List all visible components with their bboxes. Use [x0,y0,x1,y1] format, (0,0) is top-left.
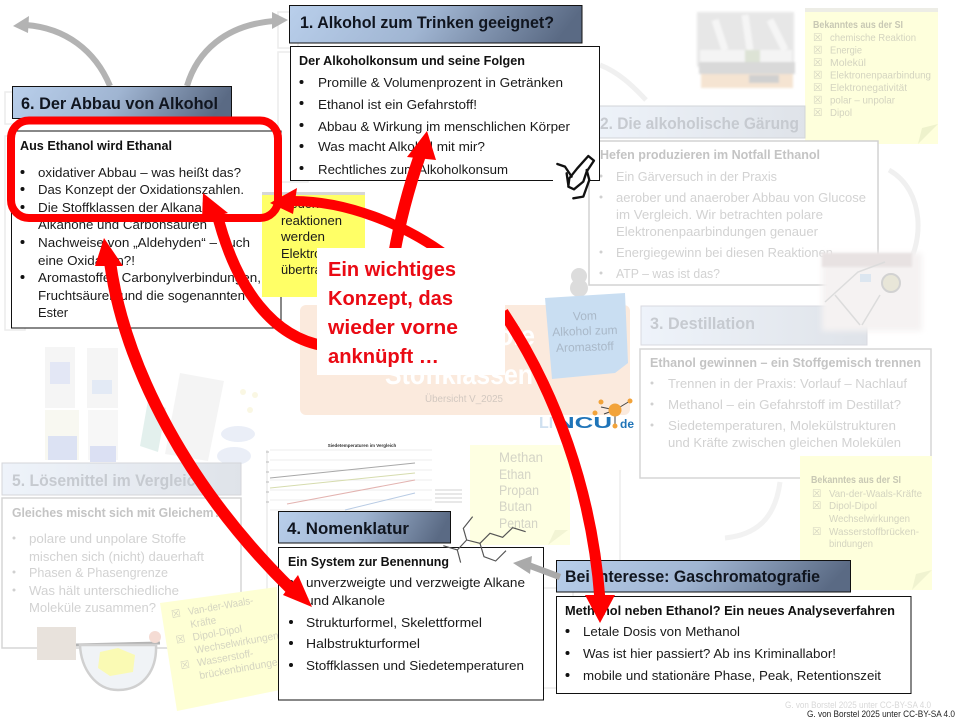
logo: LINCU.de: NCU [556,415,612,432]
panel: 6. Aus Ethanol wird Ethanal: Alkanone und Carbonsäuren [38,217,207,232]
faded sticky note: Bekanntes aus der SI (bottom): Dipol-Dipol [829,500,877,512]
faded panel: 3. Destillation: Methanol – ein Gefahrstoff im Destillat? [668,397,901,412]
header: 6. Der Abbau von Alkohol [12,86,232,118]
panel: 6. Aus Ethanol wird Ethanal: eine Oxidation?! [38,253,135,268]
faded title panel: Stoffklassen [300,305,630,415]
faded sticky note: Bekanntes aus der SI (top): Elektronegativität [830,82,907,94]
sticky note: Redoxreaktionen: übertragen [281,262,343,277]
panel: 4. Ein System zur Benennung: Ein System zur Benennung [288,554,449,569]
callout: Ein wichtiges Konzept: wieder vorne [327,317,458,339]
panel: 1. Der Alkoholkonsum und seine Folgen: Promille & Volumenprozent in Getränken [318,75,563,90]
panel: 4. Ein System zur Benennung: und Alkanole [306,593,385,608]
faded blue note: Vom Alkohol zum Aromastoff [545,293,628,379]
faded rotated sticky note: brückenbindungen [198,655,284,682]
panel: Methanol neben Ethanol: mobile und stationäre Phase, Peak, Retentionszeit [583,668,881,683]
logo: LINCU.de [539,398,634,432]
panel: 6. Aus Ethanol wird Ethanal: oxidativer Abbau – was heißt das? [38,165,241,180]
faded sticky note: Bekanntes aus der SI (bottom): Wasserstoffbrücken- [829,526,919,538]
icon: skeletal formula molecule [443,517,526,563]
faded footer: G. von Borstel 2025 unter CC-BY-SA 4.0 [785,700,931,711]
faded title panel: Stoffklassen: Stoffklassen [385,359,533,390]
faded rotated sticky note: ☒ [179,659,191,672]
faded blue note: Vom Alkohol zum Aromastoff: Aromastoff [556,339,615,355]
faded panel: 3. Destillation: 3. Destillation [650,314,755,333]
panel: Methanol neben Ethanol: Was ist hier passiert? Ab ins Kriminallabor! [583,646,836,661]
header: Bei Interesse: Gaschromatografie: Bei Interesse: Gaschromatografie [565,567,820,586]
faded sticky note: Bekanntes aus der SI (top): Bekanntes aus der SI [813,19,903,31]
callout: Ein wichtiges Konzept: Ein wichtiges [328,259,456,281]
faded rotated sticky note: ☒ [170,608,182,621]
faded rotated sticky note: Wasserstoff- [196,647,255,669]
panel: 4. Ein System zur Benennung: Halbstrukturformel [306,636,420,651]
grey arrow: Gaschromatografie to Nomenklatur [513,556,560,577]
header: 1. Alkohol zum Trinken geeignet? [290,6,582,43]
faded panel: 3. Destillation: Siedetemperaturen, Molekülstrukturen [668,418,896,433]
panel: 6. Aus Ethanol wird Ethanal: Das Konzept der Oxidationszahlen. [38,182,244,197]
faded sticky note: Bekanntes aus der SI (top): ☒ [813,94,822,106]
faded panel: 2. Die alkoholische Gärung: im Vergleich. Wir betrachten polare [616,207,823,222]
faded sticky note: Bekanntes aus der SI (top): ☒ [813,32,822,44]
faded photo: distillation apparatus [822,253,922,331]
faded sticky note: Bekanntes aus der SI (top): polar – unpolar [830,94,895,106]
faded panel: 3. Destillation: und Kräfte zwischen gleichen Molekülen [668,435,901,450]
faded sticky note: Bekanntes aus der SI (bottom): bindungen [829,538,873,550]
faded sticky note: Bekanntes aus der SI (top): ☒ [813,107,822,119]
faded sticky note: Bekanntes aus der SI (top): chemische Reaktion [830,32,916,44]
faded rotated sticky note [160,587,284,711]
faded photos: test cards and pipette samples [45,347,258,465]
panel: 4. Ein System zur Benennung: Stoffklassen und Siedetemperaturen [306,658,524,673]
red arrow: callout to Redox note [270,188,450,258]
faded panel: 5. Lösemittel im Vergleich: mischen sich (nicht) dauerhaft [29,549,204,564]
faded sticky note: alkane list: Butan [499,499,532,514]
callout: Ein wichtiges Konzept: anknüpft … [328,346,439,368]
faded rotated sticky note: Wechselwirkungen [194,630,280,656]
red arrow: callout to Letale Dosis [503,312,615,623]
red double-headed arrow: panel 6 to Nomenklatur [95,238,312,607]
sticky note: Redoxreaktionen [262,192,365,297]
red arrow: callout to menschlichen Körper [394,131,436,255]
logo: LINCU.de: de [620,417,634,431]
faded sticky note: alkane list: Pentan [499,516,538,531]
panel: Methanol neben Ethanol [556,596,911,694]
faded sticky note: Bekanntes aus der SI (bottom) [800,456,932,590]
faded sticky note: Bekanntes aus der SI (top): ☒ [813,70,822,82]
header: 6. Der Abbau von Alkohol: 6. Der Abbau von Alkohol [21,94,218,113]
faded rotated sticky note: Dipol-Dipol [192,623,243,644]
faded panel: 2. Die alkoholische Gärung: Energiegewinn bei diesen Reaktionen [616,245,833,260]
faded panel: 2. Die alkoholische Gärung: Ein Gärversuch in der Praxis [616,169,777,184]
faded title panel: Stoffklassen: Übersicht V_2025 [425,393,503,405]
faded blue note: Vom Alkohol zum Aromastoff: Vom [573,309,597,323]
grey arrow: to panel 5 direction (left) [13,16,110,86]
header: 4. Nomenklatur: 4. Nomenklatur [287,519,409,538]
panel: 1. Der Alkoholkonsum und seine Folgen: Abbau & Wirkung im menschlichen Körper [318,119,571,134]
faded sticky note: Bekanntes aus der SI (top): Energie [830,44,862,56]
faded title panel: Stoffklassen: Alkohole [425,320,535,351]
panel: 6. Aus Ethanol wird Ethanal: Die Stoffklassen der Alkanale, [38,200,216,215]
red rounded highlight frame [11,120,278,218]
faded sticky note: alkane list: Methan [499,450,543,465]
panel: 1. Der Alkoholkonsum und seine Folgen: Der Alkoholkonsum und seine Folgen [299,53,525,68]
panel: Methanol neben Ethanol: Methanol neben Ethanol? Ein neues Analyseverfahren [565,603,895,618]
sticky note: Redoxreaktionen: reaktionen [281,213,342,228]
header: 1. Alkohol zum Trinken geeignet?: 1. Alkohol zum Trinken geeignet? [300,13,554,32]
faded blue note: Vom Alkohol zum Aromastoff: Alkohol zum [552,323,618,339]
panel: 6. Aus Ethanol wird Ethanal [12,131,281,328]
panel: 1. Der Alkoholkonsum und seine Folgen [290,46,600,180]
faded sticky note: Bekanntes aus der SI (bottom): Bekanntes aus der SI [811,474,901,486]
faded sticky note: Bekanntes aus der SI (bottom): ☒ [812,500,821,512]
faded sticky note: alkane list [470,445,570,545]
faded sticky note: Bekanntes aus der SI (top) [805,8,938,144]
faded sticky note: Bekanntes aus der SI (top): ☒ [813,82,822,94]
panel: 1. Der Alkoholkonsum und seine Folgen: Was macht Alkohol mit mir? [318,139,485,154]
panel: Methanol neben Ethanol: Letale Dosis von Methanol [583,624,740,639]
faded panel: 5. Lösemittel im Vergleich: Phasen & Phasengrenze [29,565,168,580]
faded panel: 3. Destillation [640,306,931,478]
faded sticky note: Bekanntes aus der SI (top): ☒ [813,57,822,69]
faded rotated sticky note: Van-der-Waals- [187,595,255,618]
sticky note: Redoxreaktionen: Redox- [281,196,323,211]
faded sticky note: Bekanntes aus der SI (bottom): ☒ [812,488,821,500]
faded panel: 5. Lösemittel im Vergleich: Was hält unterschiedliche [29,583,179,598]
faded sticky note: Bekanntes aus der SI (bottom): Wechselwirkungen [829,513,910,525]
faded panel: 5. Lösemittel im Vergleich: Moleküle zusammen? [29,600,156,615]
sticky note: Redoxreaktionen: werden [280,229,325,244]
faded panel: 2. Die alkoholische Gärung: aerober und anaerober Abbau von Glucose [616,190,866,205]
logo: LINCU.de: LI [539,415,553,432]
faded panel: 5. Lösemittel im Vergleich [2,463,241,648]
faded line chart: Siedetemperaturen im Vergleich: Siedetemperaturen im Vergleich [328,443,397,448]
header: 4. Nomenklatur [278,512,450,543]
callout: Ein wichtiges Konzept [317,248,505,375]
grey arrow: to panel 1 [187,12,288,86]
panel: 4. Ein System zur Benennung: unverzweigte und verzweigte Alkane [306,575,525,590]
faded sticky note: Bekanntes aus der SI (top): ☒ [813,44,822,56]
faded panel: 2. Die alkoholische Gärung: Elektronenpaarbindungen genauer [616,224,819,239]
faded panel: 2. Die alkoholische Gärung: Hefen produzieren im Notfall Ethanol [600,147,820,162]
faded panel: 5. Lösemittel im Vergleich: polare und unpolare Stoffe [29,531,186,546]
faded line chart: Siedetemperaturen im Vergleich [266,443,462,510]
faded sticky note: alkane list: Propan [499,483,539,498]
faded sticky note: Bekanntes aus der SI (top): Elektronenpaarbindung [830,70,931,82]
faded panel: 2. Die alkoholische Gärung: 2. Die alkoholische Gärung [600,114,799,133]
faded panel: 2. Die alkoholische Gärung: ATP – was ist das? [616,266,720,281]
header: Bei Interesse: Gaschromatografie [556,560,850,592]
faded panel: 3. Destillation: Ethanol gewinnen – ein Stoffgemisch trennen [650,355,921,370]
faded photo: glasses [37,627,161,690]
faded rotated sticky note: Kräfte [189,614,217,631]
panel: 1. Der Alkoholkonsum und seine Folgen: Ethanol ist ein Gefahrstoff! [318,97,477,112]
panel: 4. Ein System zur Benennung: Strukturformel, Skelettformel [306,615,482,630]
faded panel: 2. Die alkoholische Gärung [589,106,878,285]
panel: 1. Der Alkoholkonsum und seine Folgen: Rechtliches zum Alkoholkonsum [318,162,508,177]
faded panel: 5. Lösemittel im Vergleich: 5. Lösemittel im Vergleich [12,471,205,490]
faded pin [570,268,588,297]
faded panel: 3. Destillation: Trennen in der Praxis: Vorlauf – Nachlauf [668,376,907,391]
panel: 6. Aus Ethanol wird Ethanal: Nachweise von „Aldehyden“ – auch [38,235,250,250]
red arrow: callout to Oxidationszahlen [202,193,325,346]
faded photo: balance with flasks [697,12,795,88]
faded panel: 5. Lösemittel im Vergleich: Gleiches mischt sich mit Gleichem? [12,505,221,520]
faded sticky note: Bekanntes aus der SI (bottom): Van-der-Waals-Kräfte [829,488,922,500]
faded sticky note: Bekanntes aus der SI (top): Dipol [830,107,852,119]
faded sticky note: Bekanntes aus der SI (top): Molekül [830,57,866,69]
faded sticky note: Bekanntes aus der SI (bottom): ☒ [812,526,821,538]
sticky note: Redoxreaktionen: Elektronen [281,246,343,261]
panel: 4. Ein System zur Benennung [278,548,544,700]
faded sticky note: alkane list: Ethan [499,467,531,482]
panel: 6. Aus Ethanol wird Ethanal: Aromastoffe? Carbonylverbindungen, [38,270,261,285]
icon: person drinking from bottle [553,156,594,202]
panel: 6. Aus Ethanol wird Ethanal: Ester [38,305,69,320]
panel: 6. Aus Ethanol wird Ethanal: Aus Ethanol wird Ethanal [20,138,172,153]
faded rotated sticky note: ☒ [175,633,186,647]
callout: Ein wichtiges Konzept: Konzept, das [328,288,453,310]
panel: 6. Aus Ethanol wird Ethanal: Fruchtsäuren und die sogenannten [38,288,245,303]
